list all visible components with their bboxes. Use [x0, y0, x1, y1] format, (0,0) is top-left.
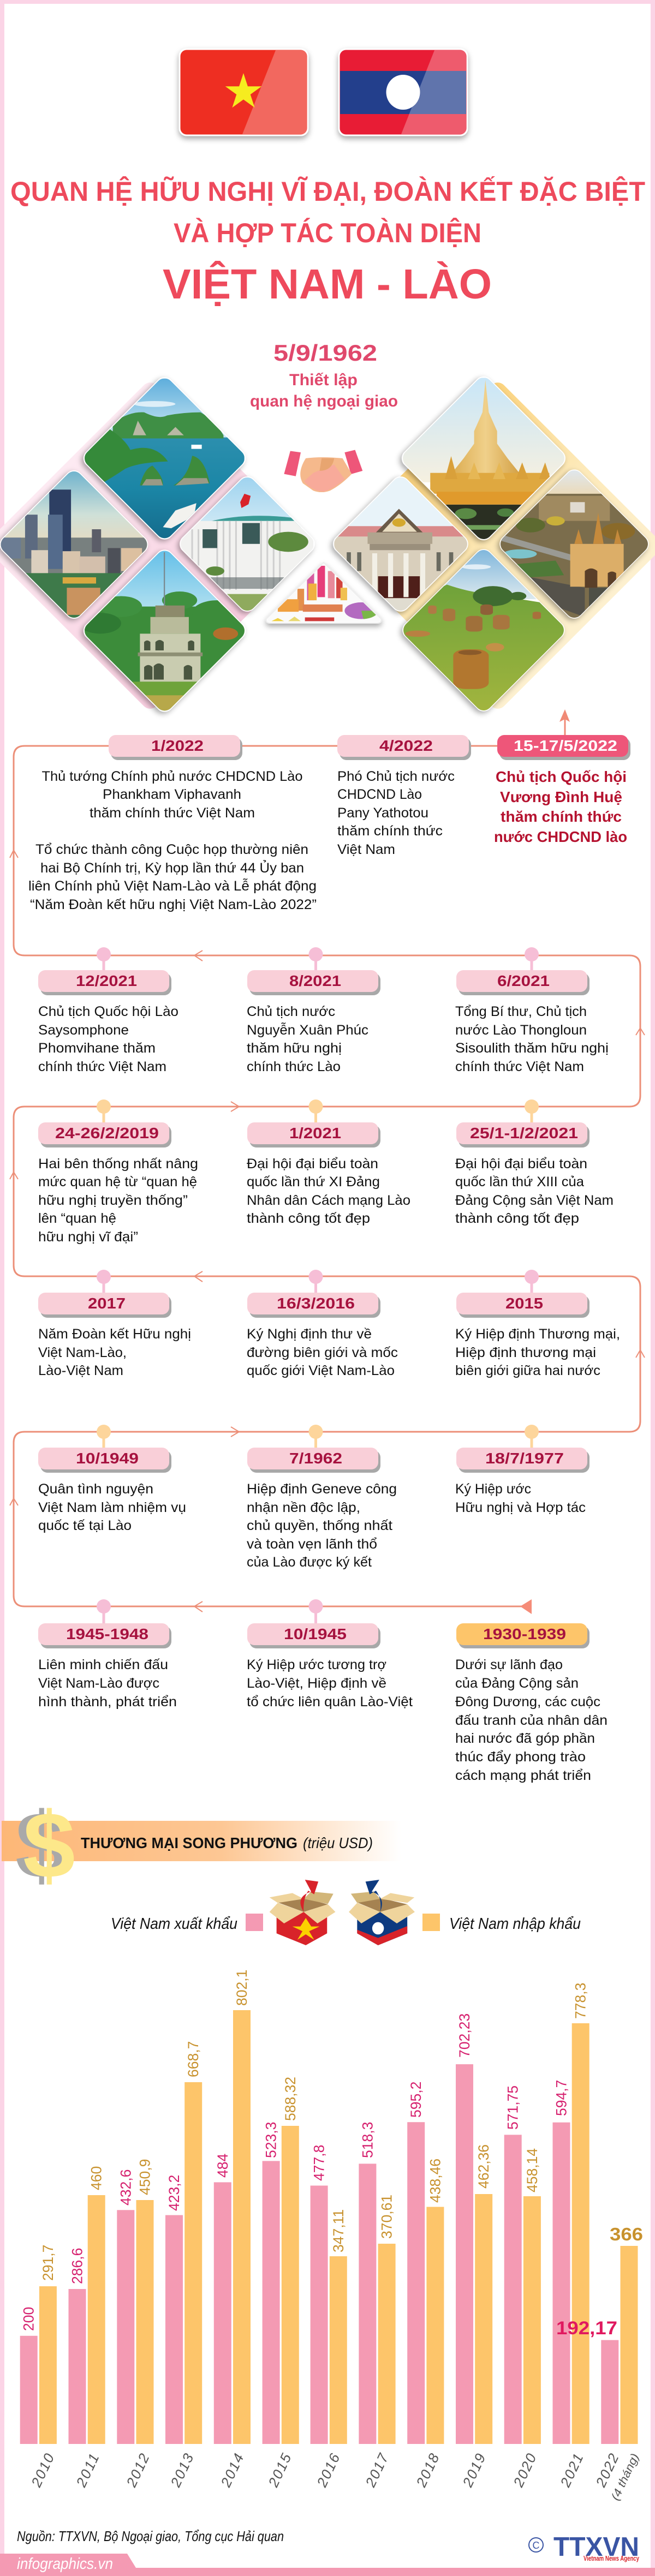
background diamond gold: [331, 379, 655, 712]
event text: quốc tế tại Lào: [38, 1518, 132, 1533]
event text: chính thức Việt Nam: [38, 1059, 166, 1074]
event text: [38, 1657, 177, 1710]
bars 2010: 291,7: [40, 2245, 56, 2281]
event text: “Năm Đoàn kết hữu nghị Việt Nam-Lào 2022”: [30, 897, 317, 912]
date pill: [247, 1623, 380, 1648]
event text: quốc giới Việt Nam-Lào: [247, 1363, 395, 1378]
event text: liên Chính phủ Việt Nam-Lào và Lễ phát động: [28, 878, 317, 894]
event text: [247, 1481, 397, 1570]
bars 2010: [20, 2245, 57, 2444]
bars 2017: 370,61: [379, 2195, 395, 2239]
event: 16/3/2016: [247, 1293, 398, 1378]
event text: Đảng Cộng sản Việt Nam: [455, 1193, 614, 1208]
legend: imports: Việt Nam nhập khẩu: [449, 1915, 581, 1933]
date pill: [38, 1122, 171, 1147]
event text: Hai bên thống nhất nâng: [38, 1156, 198, 1172]
event text: [247, 1004, 368, 1074]
event: 1945-1948: [38, 1623, 177, 1710]
panel: photo collage: [0, 373, 655, 716]
date pill: 1/2022: [151, 737, 204, 754]
photo: Hanoi skyline: [0, 467, 152, 623]
event text: lên “quan hệ: [38, 1211, 116, 1226]
event: 6/2021: [455, 970, 609, 1074]
date pill: [247, 1293, 380, 1318]
bars 2017: 518,3: [359, 2122, 376, 2158]
event text: [247, 1156, 410, 1226]
bars 2014: 484: [215, 2154, 231, 2178]
event text: quốc lần thứ XI Đảng: [247, 1174, 380, 1190]
event text: Đông Dương, các cuộc: [455, 1694, 600, 1710]
source note: Nguồn: TTXVN, Bộ Ngoại giao, Tổng cục Hải quan: [17, 2528, 284, 2544]
year axis labels: 2011: [73, 2451, 102, 2490]
year axis labels: (4 tháng): [609, 2452, 641, 2502]
event text: [455, 1156, 614, 1226]
photo: That Luang: [398, 373, 569, 544]
event text: Phomvihane thăm: [38, 1041, 156, 1056]
bars 2016: 347,11: [330, 2209, 347, 2252]
bars 2012: [117, 2159, 154, 2444]
bars 2019: [456, 2013, 492, 2444]
date pill: [456, 1122, 590, 1147]
date pill: [456, 1623, 590, 1648]
event text: chính thức Việt Nam: [455, 1059, 584, 1074]
date pill: 18/7/1977: [485, 1450, 564, 1467]
event text: Sisoulith thăm hữu nghị: [455, 1041, 609, 1056]
milestone date: 5/9/1962: [273, 340, 377, 366]
title: VIỆT NAM - LÀO: [163, 260, 492, 308]
date pill: 1945-1948: [66, 1625, 148, 1642]
event text: Pany Yathotou: [337, 805, 428, 821]
event text: Đại hội đại biểu toàn: [247, 1156, 378, 1172]
date pill: 10/1945: [284, 1625, 347, 1642]
date pill: [337, 735, 471, 760]
event: 2015: [455, 1293, 620, 1378]
date pill: [456, 1448, 590, 1473]
event text: Lào-Việt, Hiệp định về: [247, 1676, 386, 1691]
event text: [337, 769, 455, 857]
date pill: 25/1-1/2/2021: [470, 1125, 578, 1141]
legend: exports: Việt Nam xuất khẩu: [111, 1915, 237, 1933]
event text: thăm chính thức: [337, 823, 443, 839]
event: 1/2022: [28, 735, 317, 912]
event text: Việt Nam làm nhiệm vụ: [38, 1500, 186, 1515]
event text: thành công tốt đẹp: [247, 1211, 370, 1226]
year axis labels: 2014: [217, 2451, 247, 2490]
event text: Việt Nam-Lào được: [38, 1676, 159, 1691]
date pill: [456, 1293, 590, 1318]
event text: Quân tình nguyện: [38, 1481, 153, 1497]
date pill: [38, 970, 171, 995]
year axis labels: 2018: [413, 2451, 443, 2490]
icon: dollar sign: $: [15, 1793, 68, 1898]
bars 2019: 462,36: [475, 2144, 492, 2189]
year axis labels: 2020: [510, 2451, 540, 2490]
event text: Vương Đình Huệ: [500, 788, 622, 805]
bars 2022: 366: [610, 2224, 643, 2244]
date pill: 6/2021: [497, 972, 550, 989]
date pill: [38, 1448, 171, 1473]
event text: Hữu nghị và Hợp tác: [455, 1500, 586, 1515]
photo: Plain of Jars: [398, 545, 569, 715]
year axis labels: 2013: [167, 2451, 197, 2490]
event text: quốc lần thứ XIII của: [455, 1174, 584, 1190]
event text: [28, 769, 317, 912]
footer band: infographics.vn: [17, 2555, 113, 2573]
event: 8/2021: [247, 970, 380, 1074]
event text: Năm Đoàn kết Hữu nghị: [38, 1326, 191, 1342]
event text: Tổng Bí thư, Chủ tịch: [455, 1004, 587, 1019]
event text: [455, 1657, 608, 1783]
bars 2014: 802,1: [234, 1970, 250, 2006]
event: 25/1-1/2/2021: [455, 1122, 614, 1226]
date pill: 8/2021: [289, 972, 341, 989]
bars 2015: 588,32: [282, 2077, 299, 2121]
event text: Liên minh chiến đấu: [38, 1657, 168, 1672]
event: 1930-1939: [455, 1623, 608, 1783]
year axis labels: 2010: [28, 2451, 57, 2490]
event: 15-17/5/2022 highlighted: [494, 735, 630, 845]
date pill: 16/3/2016: [277, 1295, 355, 1312]
event text: Ký Nghị định thư về: [247, 1326, 372, 1342]
photo: Turtle Tower: [79, 546, 249, 716]
event text: Nguyễn Xuân Phúc: [247, 1022, 368, 1038]
event text: nước Lào Thongloun: [455, 1023, 587, 1038]
heading text: THƯƠNG MẠI SONG PHƯƠNG: [81, 1834, 297, 1851]
event text: nhận nền độc lập,: [247, 1500, 360, 1515]
date pill: 24-26/2/2019: [55, 1125, 159, 1141]
date pill: 1930-1939: [483, 1625, 566, 1642]
year axis labels: 2016: [313, 2451, 343, 2490]
event text: Saysomphone: [38, 1023, 129, 1038]
event: 10/1949: [38, 1448, 186, 1533]
date pill: 1/2021: [289, 1125, 341, 1141]
event text: Hiệp định Geneve công: [247, 1481, 397, 1497]
photo: Lao National Assembly: [329, 473, 472, 615]
bars 2021: 594,7: [553, 2080, 570, 2116]
event: 1/2021: [247, 1122, 410, 1226]
event text: [38, 1156, 198, 1245]
event: 12/2021: [38, 970, 178, 1074]
date pill: [38, 1293, 171, 1318]
event text: mức quan hệ từ “quan hệ: [38, 1174, 197, 1190]
event text: hai nước đã góp phần: [455, 1731, 595, 1746]
date pill: 2015: [505, 1295, 543, 1312]
event text: Chủ tịch Quốc hội: [496, 768, 627, 785]
logo: TTXVN: C: [533, 2540, 539, 2551]
bars 2016: [311, 2145, 347, 2444]
year axis labels: [28, 2450, 641, 2502]
event text: Hiệp định thương mại: [455, 1345, 596, 1360]
event text: Lào-Việt Nam: [38, 1363, 123, 1378]
event text: hữu nghị truyền thống”: [38, 1193, 188, 1208]
bars 2017: [359, 2122, 396, 2444]
bars 2019: 702,23: [456, 2013, 473, 2058]
bars 2018: 438,46: [427, 2159, 443, 2203]
event: 10/1945: [247, 1623, 413, 1710]
date pill: 4/2022: [379, 737, 433, 754]
event text: Phó Chủ tịch nước: [337, 769, 455, 784]
flag: Laos: [339, 49, 467, 135]
event text: thăm hữu nghị: [247, 1041, 342, 1056]
timeline nodes row 2: [97, 947, 539, 971]
bars 2020: 458,14: [524, 2148, 540, 2192]
event text: [455, 1004, 609, 1074]
flags: [180, 49, 467, 135]
bars 2015: [263, 2077, 299, 2444]
bars 2021: 778,3: [573, 1983, 589, 2019]
year axis labels: 2012: [123, 2451, 153, 2490]
date pill: [109, 735, 242, 760]
bars 2021: [552, 1983, 590, 2444]
bars 2014: [214, 1970, 251, 2444]
event text: [38, 1326, 191, 1378]
bar chart: [20, 1970, 643, 2502]
photo: Ha Long bay: [80, 373, 249, 543]
date pill: [456, 970, 590, 995]
icon: dollar sign: $: [23, 1793, 75, 1898]
milestone date: [250, 340, 398, 410]
event text: đường biên giới và mốc: [247, 1345, 398, 1360]
title: VÀ HỢP TÁC TOÀN DIỆN: [174, 218, 481, 248]
event text: [455, 1481, 586, 1515]
event text: [455, 1326, 620, 1378]
event text: [247, 1657, 413, 1710]
event text: thành công tốt đẹp: [455, 1211, 579, 1226]
event text: của Lào được ký kết: [247, 1555, 372, 1570]
bars 2016: 477,8: [311, 2145, 327, 2181]
flag: Vietnam: [180, 49, 308, 135]
date pill: [497, 735, 630, 760]
date pill: 7/1962: [289, 1450, 342, 1467]
icon: Laos box: [349, 1880, 415, 1945]
event text: [38, 1004, 178, 1074]
event text: Dưới sự lãnh đạo: [455, 1657, 563, 1672]
event text: biên giới giữa hai nước: [455, 1363, 600, 1378]
year axis labels: 2022: [592, 2451, 622, 2490]
event text: chính thức Lào: [247, 1059, 341, 1074]
date pill: [38, 1623, 171, 1648]
logo: TTXVN: TTXVN: [553, 2532, 639, 2562]
event: 7/1962: [247, 1448, 397, 1570]
icon: Vietnam box: [270, 1880, 336, 1945]
milestone date: Thiết lập: [289, 371, 358, 389]
timeline nodes row 6: [97, 1599, 323, 1624]
title: QUAN HỆ HỮU NGHỊ VĨ ĐẠI, ĐOÀN KẾT ĐẶC BIỆT: [10, 176, 645, 207]
bars 2022: 192,17: [556, 2318, 617, 2339]
event text: đấu tranh của nhân dân: [455, 1713, 608, 1728]
timeline nodes row 5: [97, 1425, 539, 1449]
photo: economy chart triangle: [266, 563, 381, 623]
background diamond pink: [0, 379, 317, 712]
timeline path: [10, 746, 645, 1612]
date pill: 2017: [88, 1295, 126, 1312]
bars 2013: 668,7: [185, 2041, 201, 2077]
milestone date: quan hệ ngoại giao: [250, 392, 398, 410]
bars 2020: [504, 2085, 541, 2444]
bars 2010: 200: [21, 2307, 37, 2331]
photo: Patuxay: [496, 465, 653, 623]
event text: cách mạng phát triển: [455, 1768, 591, 1783]
event text: Ký Hiệp định Thương mại,: [455, 1326, 620, 1342]
title: [10, 176, 645, 308]
heading text: (triệu USD): [303, 1834, 373, 1851]
event text: Phankham Viphavanh: [103, 787, 241, 802]
bars 2022: [556, 2224, 643, 2444]
event text: và toàn vẹn lãnh thổ: [247, 1537, 377, 1552]
date pill: 15-17/5/2022: [514, 737, 617, 754]
bars 2012: 432,6: [117, 2169, 134, 2206]
event: 2017: [38, 1293, 191, 1378]
event text: Việt Nam: [337, 842, 395, 857]
event text: Đại hội đại biểu toàn: [455, 1156, 587, 1172]
year axis labels: 2021: [557, 2451, 586, 2490]
date pill: [247, 970, 380, 995]
event text: Thủ tướng Chính phủ nước CHDCND Lào: [41, 769, 302, 784]
bars 2013: 423,2: [166, 2175, 182, 2211]
event text: [247, 1326, 398, 1378]
event text: hình thành, phát triển: [38, 1694, 177, 1710]
year axis labels: 2015: [265, 2451, 295, 2490]
bars 2011: [69, 2166, 105, 2444]
icon: handshake: [284, 450, 362, 492]
event text: chủ quyền, thống nhất: [247, 1518, 392, 1533]
event text: thăm chính thức Việt Nam: [90, 805, 255, 821]
heading: trade band: [2, 1793, 401, 1898]
year axis labels: 2017: [362, 2450, 392, 2490]
photo: Vietnam National Assembly: [176, 473, 319, 615]
event text: nước CHDCND lào: [494, 828, 627, 845]
timeline nodes row 4: [97, 1270, 539, 1294]
event text: của Đảng Cộng sản: [455, 1676, 579, 1691]
date pill: 10/1949: [76, 1450, 139, 1467]
event text: [38, 1481, 186, 1533]
legend: [111, 1880, 581, 1945]
bars 2013: [165, 2041, 202, 2444]
event text: Chủ tịch Quốc hội Lào: [38, 1004, 178, 1019]
footer band: [0, 2554, 655, 2576]
bars 2018: [407, 2082, 444, 2444]
bars 2011: 460: [88, 2166, 105, 2190]
event text: [494, 768, 627, 845]
date pill: [247, 1448, 380, 1473]
event text: Ký Hiệp ước tương trợ: [247, 1657, 386, 1672]
event text: Ký Hiệp ước: [455, 1481, 531, 1497]
arrow: up to photos: [559, 709, 570, 736]
bars 2012: 450,9: [136, 2159, 153, 2195]
event text: Nhân dân Cách mạng Lào: [247, 1193, 410, 1208]
event text: Tổ chức thành công Cuộc họp thường niên: [35, 842, 308, 857]
year axis labels: 2019: [459, 2451, 489, 2490]
date pill: 12/2021: [76, 972, 137, 989]
bars 2015: 523,3: [263, 2122, 279, 2158]
event text: hai Bộ Chính trị, Kỳ họp lần thứ 44 Ủy ban: [40, 859, 304, 876]
event: 24-26/2/2019: [38, 1122, 198, 1245]
timeline nodes row 3: [97, 1099, 539, 1123]
event text: thúc đẩy phong trào: [455, 1749, 586, 1765]
bars 2018: 595,2: [408, 2082, 424, 2118]
arrow: timeline start: [520, 1599, 532, 1614]
bars 2011: 286,6: [69, 2248, 85, 2284]
event text: thăm chính thức: [501, 808, 622, 825]
event: 18/7/1977: [455, 1448, 590, 1515]
event text: tổ chức liên quân Lào-Việt: [247, 1694, 413, 1710]
event text: Việt Nam-Lào,: [38, 1345, 127, 1360]
event text: hữu nghị vĩ đại”: [38, 1229, 138, 1245]
event: 4/2022: [337, 735, 471, 857]
date pill: [247, 1122, 380, 1147]
event text: CHDCND Lào: [337, 787, 422, 802]
bars 2020: 571,75: [505, 2085, 521, 2130]
event text: Chủ tịch nước: [247, 1004, 335, 1019]
